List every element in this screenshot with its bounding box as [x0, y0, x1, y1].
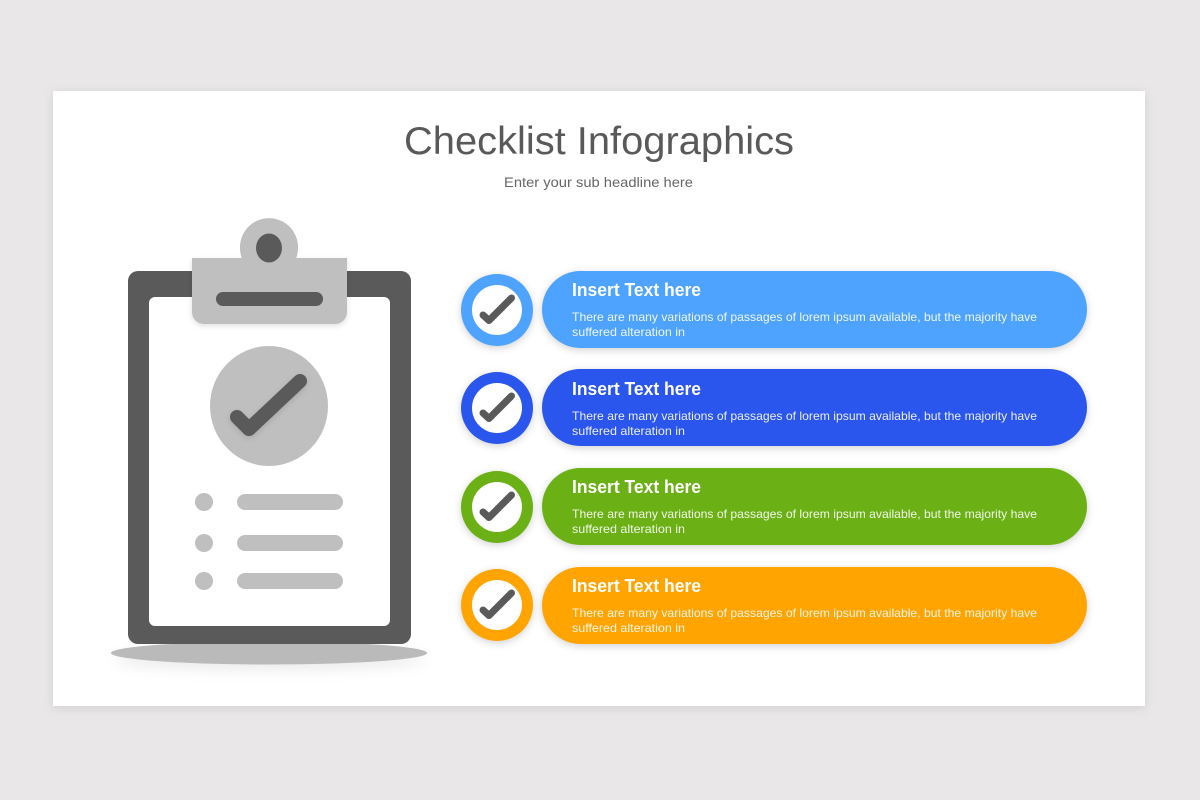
- heading: Insert Text here: [572, 576, 701, 596]
- checklist item 4: [461, 567, 1087, 644]
- list row 1: [195, 493, 343, 511]
- heading: Insert Text here: [572, 379, 701, 399]
- pill orange: [542, 567, 1087, 644]
- clipboard board: [128, 271, 411, 644]
- ground shadow blur: [113, 648, 425, 670]
- large check badge: [210, 346, 328, 466]
- description: suffered alteration in: [572, 424, 685, 438]
- clip slot: [216, 292, 323, 306]
- clip hole: [256, 234, 282, 262]
- pill blue: [542, 271, 1087, 348]
- pill dark blue: [542, 369, 1087, 446]
- clipboard ground shadow: [111, 642, 427, 664]
- description: [572, 606, 1037, 635]
- description: [572, 409, 1037, 438]
- list row 2: [195, 534, 343, 552]
- checklist item 1: [461, 271, 1087, 348]
- icon: check badge orange: [461, 569, 533, 641]
- description: suffered alteration in: [572, 621, 685, 635]
- description: [572, 310, 1037, 339]
- clip knob: [240, 219, 298, 277]
- description: There are many variations of passages of lorem ipsum available, but the majority have: [572, 507, 1037, 521]
- icon: clipboard: [111, 218, 427, 670]
- icon: check badge blue: [461, 274, 533, 346]
- description: suffered alteration in: [572, 522, 685, 536]
- icon: check badge dark blue: [461, 372, 533, 444]
- slide card: [53, 91, 1145, 706]
- clip knob top: [240, 218, 298, 260]
- list row 3: [195, 572, 343, 590]
- description: suffered alteration in: [572, 325, 685, 339]
- heading: Insert Text here: [572, 477, 701, 497]
- description: There are many variations of passages of lorem ipsum available, but the majority have: [572, 606, 1037, 620]
- clip plate: [192, 258, 347, 324]
- subtitle: Enter your sub headline here: [504, 174, 693, 190]
- description: [572, 507, 1037, 536]
- clipboard paper: [149, 297, 390, 626]
- heading: Insert Text here: [572, 280, 701, 300]
- description: There are many variations of passages of lorem ipsum available, but the majority have: [572, 409, 1037, 423]
- checklist item 3: [461, 468, 1087, 545]
- description: There are many variations of passages of lorem ipsum available, but the majority have: [572, 310, 1037, 324]
- title: Checklist Infographics: [404, 120, 794, 163]
- icon: large check mark: [237, 381, 300, 429]
- checklist item 2: [461, 369, 1087, 446]
- icon: check badge green: [461, 471, 533, 543]
- pill green: [542, 468, 1087, 545]
